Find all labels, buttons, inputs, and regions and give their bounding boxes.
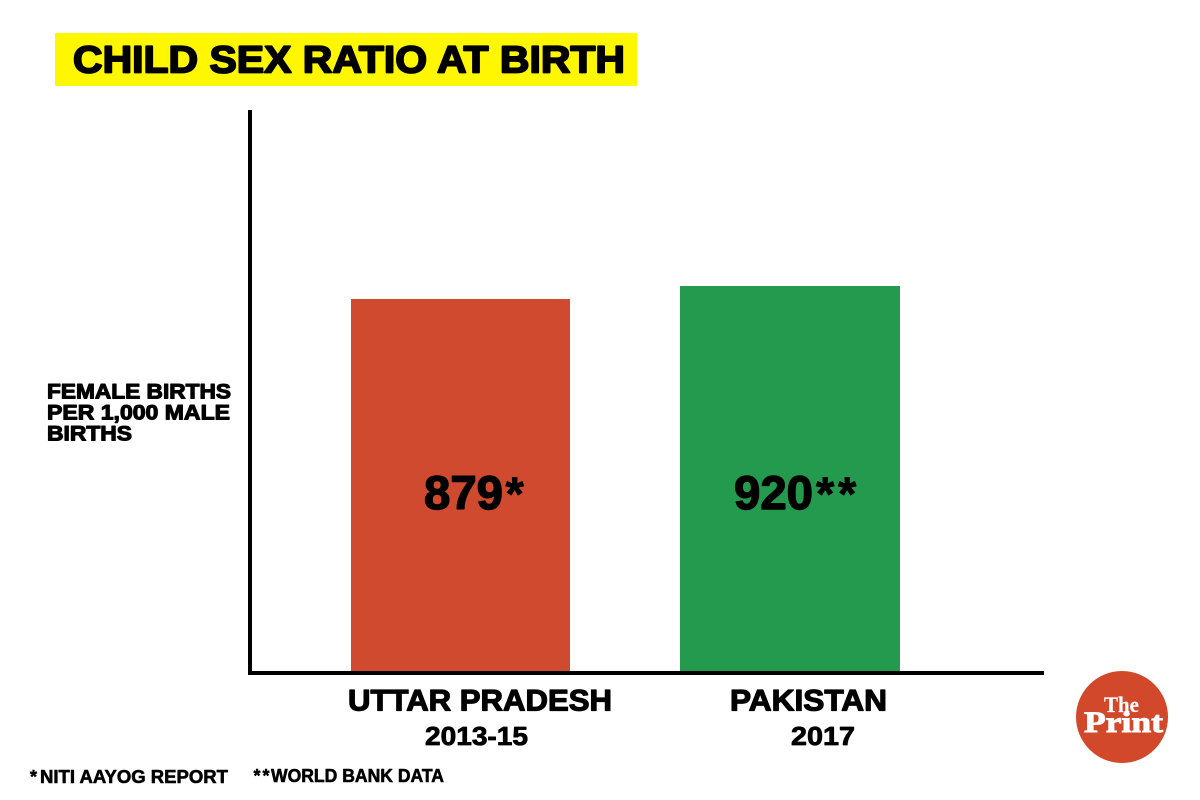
category label: Pakistan: PAKISTAN <box>730 684 887 718</box>
title <box>55 33 637 86</box>
title: CHILD SEX RATIO AT BIRTH <box>73 40 625 82</box>
bar: Pakistan: 920 <box>734 466 813 519</box>
y-axis label: PER 1,000 MALE <box>47 402 230 424</box>
category label: Uttar Pradesh: 2013-15 <box>425 721 528 751</box>
category label: Pakistan <box>730 684 887 751</box>
bar: Pakistan: * <box>838 467 857 520</box>
category label: Pakistan: 2017 <box>791 721 855 751</box>
category label: Uttar Pradesh: UTTAR PRADESH <box>348 684 612 718</box>
footnote: World Bank: * <box>254 766 261 786</box>
bar: Pakistan: * <box>816 467 835 520</box>
bar: Pakistan <box>680 286 900 672</box>
bar: Uttar Pradesh: 879 <box>424 466 503 519</box>
logo: The Print <box>1076 671 1168 763</box>
category label: Uttar Pradesh <box>348 684 612 751</box>
footnote: World Bank: * <box>262 766 270 786</box>
y-axis label: FEMALE BIRTHS <box>47 380 231 404</box>
logo: The Print: The <box>1104 692 1139 717</box>
y-axis label <box>47 380 231 446</box>
footnote: Niti Aayog: NITI AAYOG REPORT <box>40 767 228 787</box>
y-axis label: BIRTHS <box>47 422 132 446</box>
bar: Uttar Pradesh: * <box>506 467 524 520</box>
logo: The Print: Print <box>1084 706 1163 739</box>
footnote: World Bank: WORLD BANK DATA <box>271 766 444 786</box>
chart axes <box>250 110 1044 673</box>
footnote: Niti Aayog: * <box>30 767 37 787</box>
bar: Uttar Pradesh <box>351 299 570 672</box>
